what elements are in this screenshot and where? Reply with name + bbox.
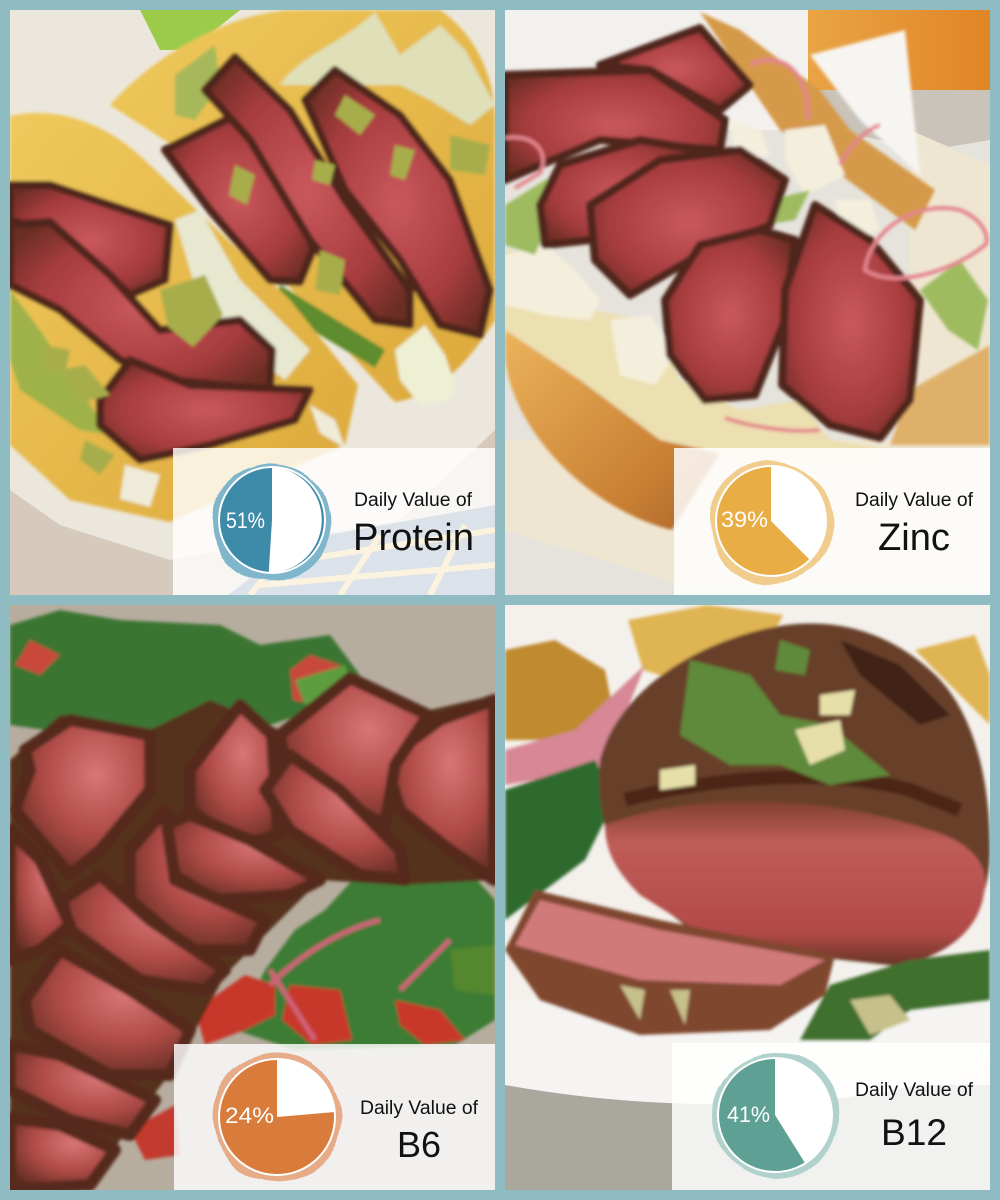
callout: protein daily value: Protein [353, 517, 474, 559]
callout: b12 daily value: B12 [881, 1112, 947, 1153]
callout: zinc daily value [674, 448, 990, 595]
panel: vitamin b12 [505, 605, 990, 1190]
callout: protein daily value [173, 448, 495, 595]
pie: 51 percent [211, 462, 331, 582]
photo: sliced steak and salad [10, 605, 495, 1190]
pie: 51 percent: 51% [226, 508, 265, 533]
photo: steak tacos [10, 10, 495, 595]
callout: zinc daily value: Zinc [878, 517, 950, 559]
callout: b6 daily value: Daily Value of [360, 1098, 479, 1119]
callout: zinc daily value: Daily Value of [855, 490, 974, 511]
photo: roast fillet [505, 605, 990, 1190]
pie: 39 percent [709, 460, 833, 584]
callout: b6 daily value: B6 [397, 1124, 441, 1165]
pie: 41 percent: 41% [727, 1102, 770, 1127]
pie: 24 percent [212, 1052, 342, 1182]
callout: b12 daily value: Daily Value of [855, 1080, 974, 1101]
photo: steak sandwich [505, 10, 990, 595]
pie: 39 percent: 39% [721, 507, 768, 532]
pie: 24 percent: 24% [225, 1103, 274, 1128]
panel: vitamin b6 [10, 605, 495, 1190]
callout: protein daily value: Daily Value of [354, 490, 473, 511]
callout: b6 daily value [174, 1044, 495, 1190]
panel: protein [10, 10, 495, 595]
callout: b12 daily value [672, 1043, 990, 1190]
panel: zinc [505, 10, 990, 595]
pie: 41 percent [713, 1053, 839, 1179]
